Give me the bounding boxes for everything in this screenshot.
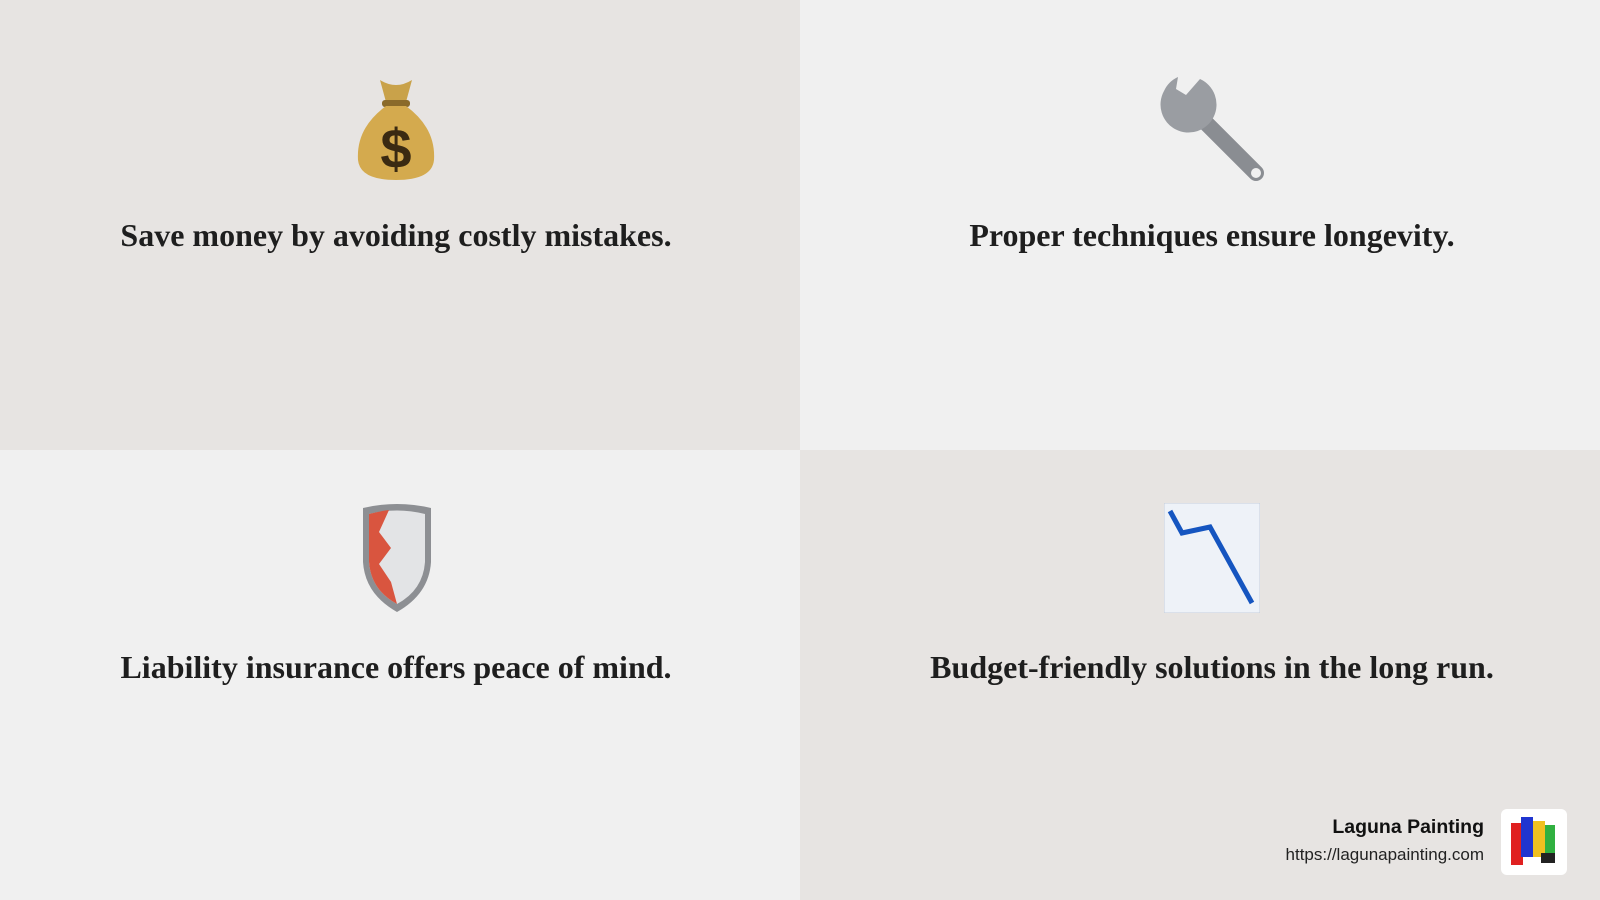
- icon: money bag: $: [380, 117, 412, 180]
- icon: wrench: [1160, 77, 1264, 181]
- panel: bottom-left: [0, 450, 800, 900]
- icon: shield: [363, 504, 431, 612]
- heading: techniques: Proper techniques ensure longevity.: [969, 217, 1455, 253]
- panel: top-left: [0, 0, 800, 450]
- heading: budget: Budget-friendly solutions in the long run.: [930, 649, 1494, 685]
- icon: money bag: [358, 80, 434, 180]
- heading: insurance: Liability insurance offers peace of mind.: [120, 649, 672, 685]
- panel: bottom-right: [800, 450, 1600, 900]
- icon: chart decreasing: [1164, 503, 1260, 613]
- brand block: [1286, 809, 1567, 875]
- heading: save money: Save money by avoiding costly mistakes.: [120, 217, 672, 253]
- brand url: https://lagunapainting.com: [1286, 845, 1484, 864]
- brand name: Laguna Painting: [1332, 816, 1484, 838]
- panel: top-right: [800, 0, 1600, 450]
- logo: [1501, 809, 1567, 875]
